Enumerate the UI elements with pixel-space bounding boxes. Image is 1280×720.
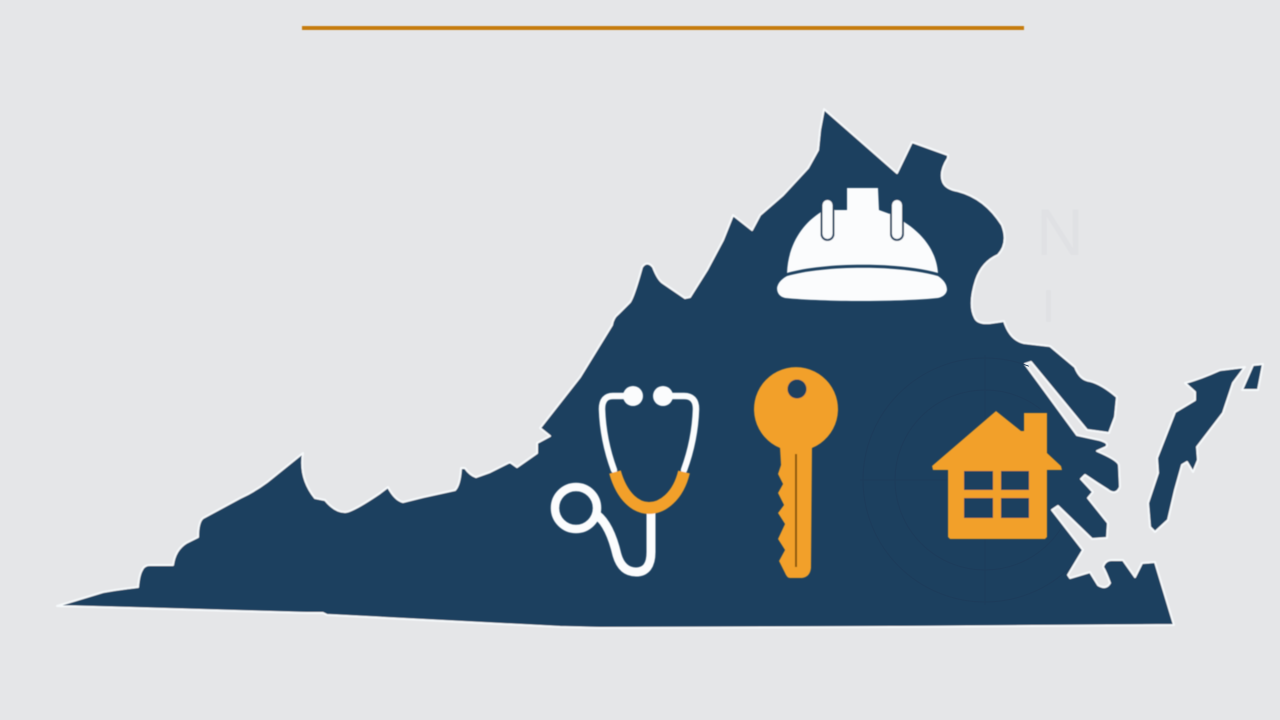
map: barrier island [1242,364,1263,390]
stethoscope orange yoke [615,472,684,508]
map: eastern shore [1148,367,1245,532]
house body and roof [932,411,1062,539]
icon: stethoscope [555,386,696,572]
accent rule [302,26,1024,30]
hat right slot [891,199,903,240]
map: Virginia [57,109,1263,628]
hat brim [777,268,947,301]
stethoscope lower tube and chest piece [597,510,651,572]
faint compass rose on map [1023,364,1029,367]
stethoscope ear tubes [602,396,696,470]
key body [754,367,838,578]
icon: house [932,411,1062,539]
icon: key [754,367,838,578]
faint compass letter [1036,195,1084,322]
map: mainland [57,109,1174,628]
hat left slot [822,199,834,240]
faint compass letter: N [1036,195,1084,269]
house windows [964,471,1029,518]
stethoscope ear tips [623,386,673,406]
infographic canvas [56,26,1264,629]
key hole [788,380,806,398]
icon: hard hat [777,188,947,301]
hat dome [787,188,938,273]
key groove [795,454,797,567]
